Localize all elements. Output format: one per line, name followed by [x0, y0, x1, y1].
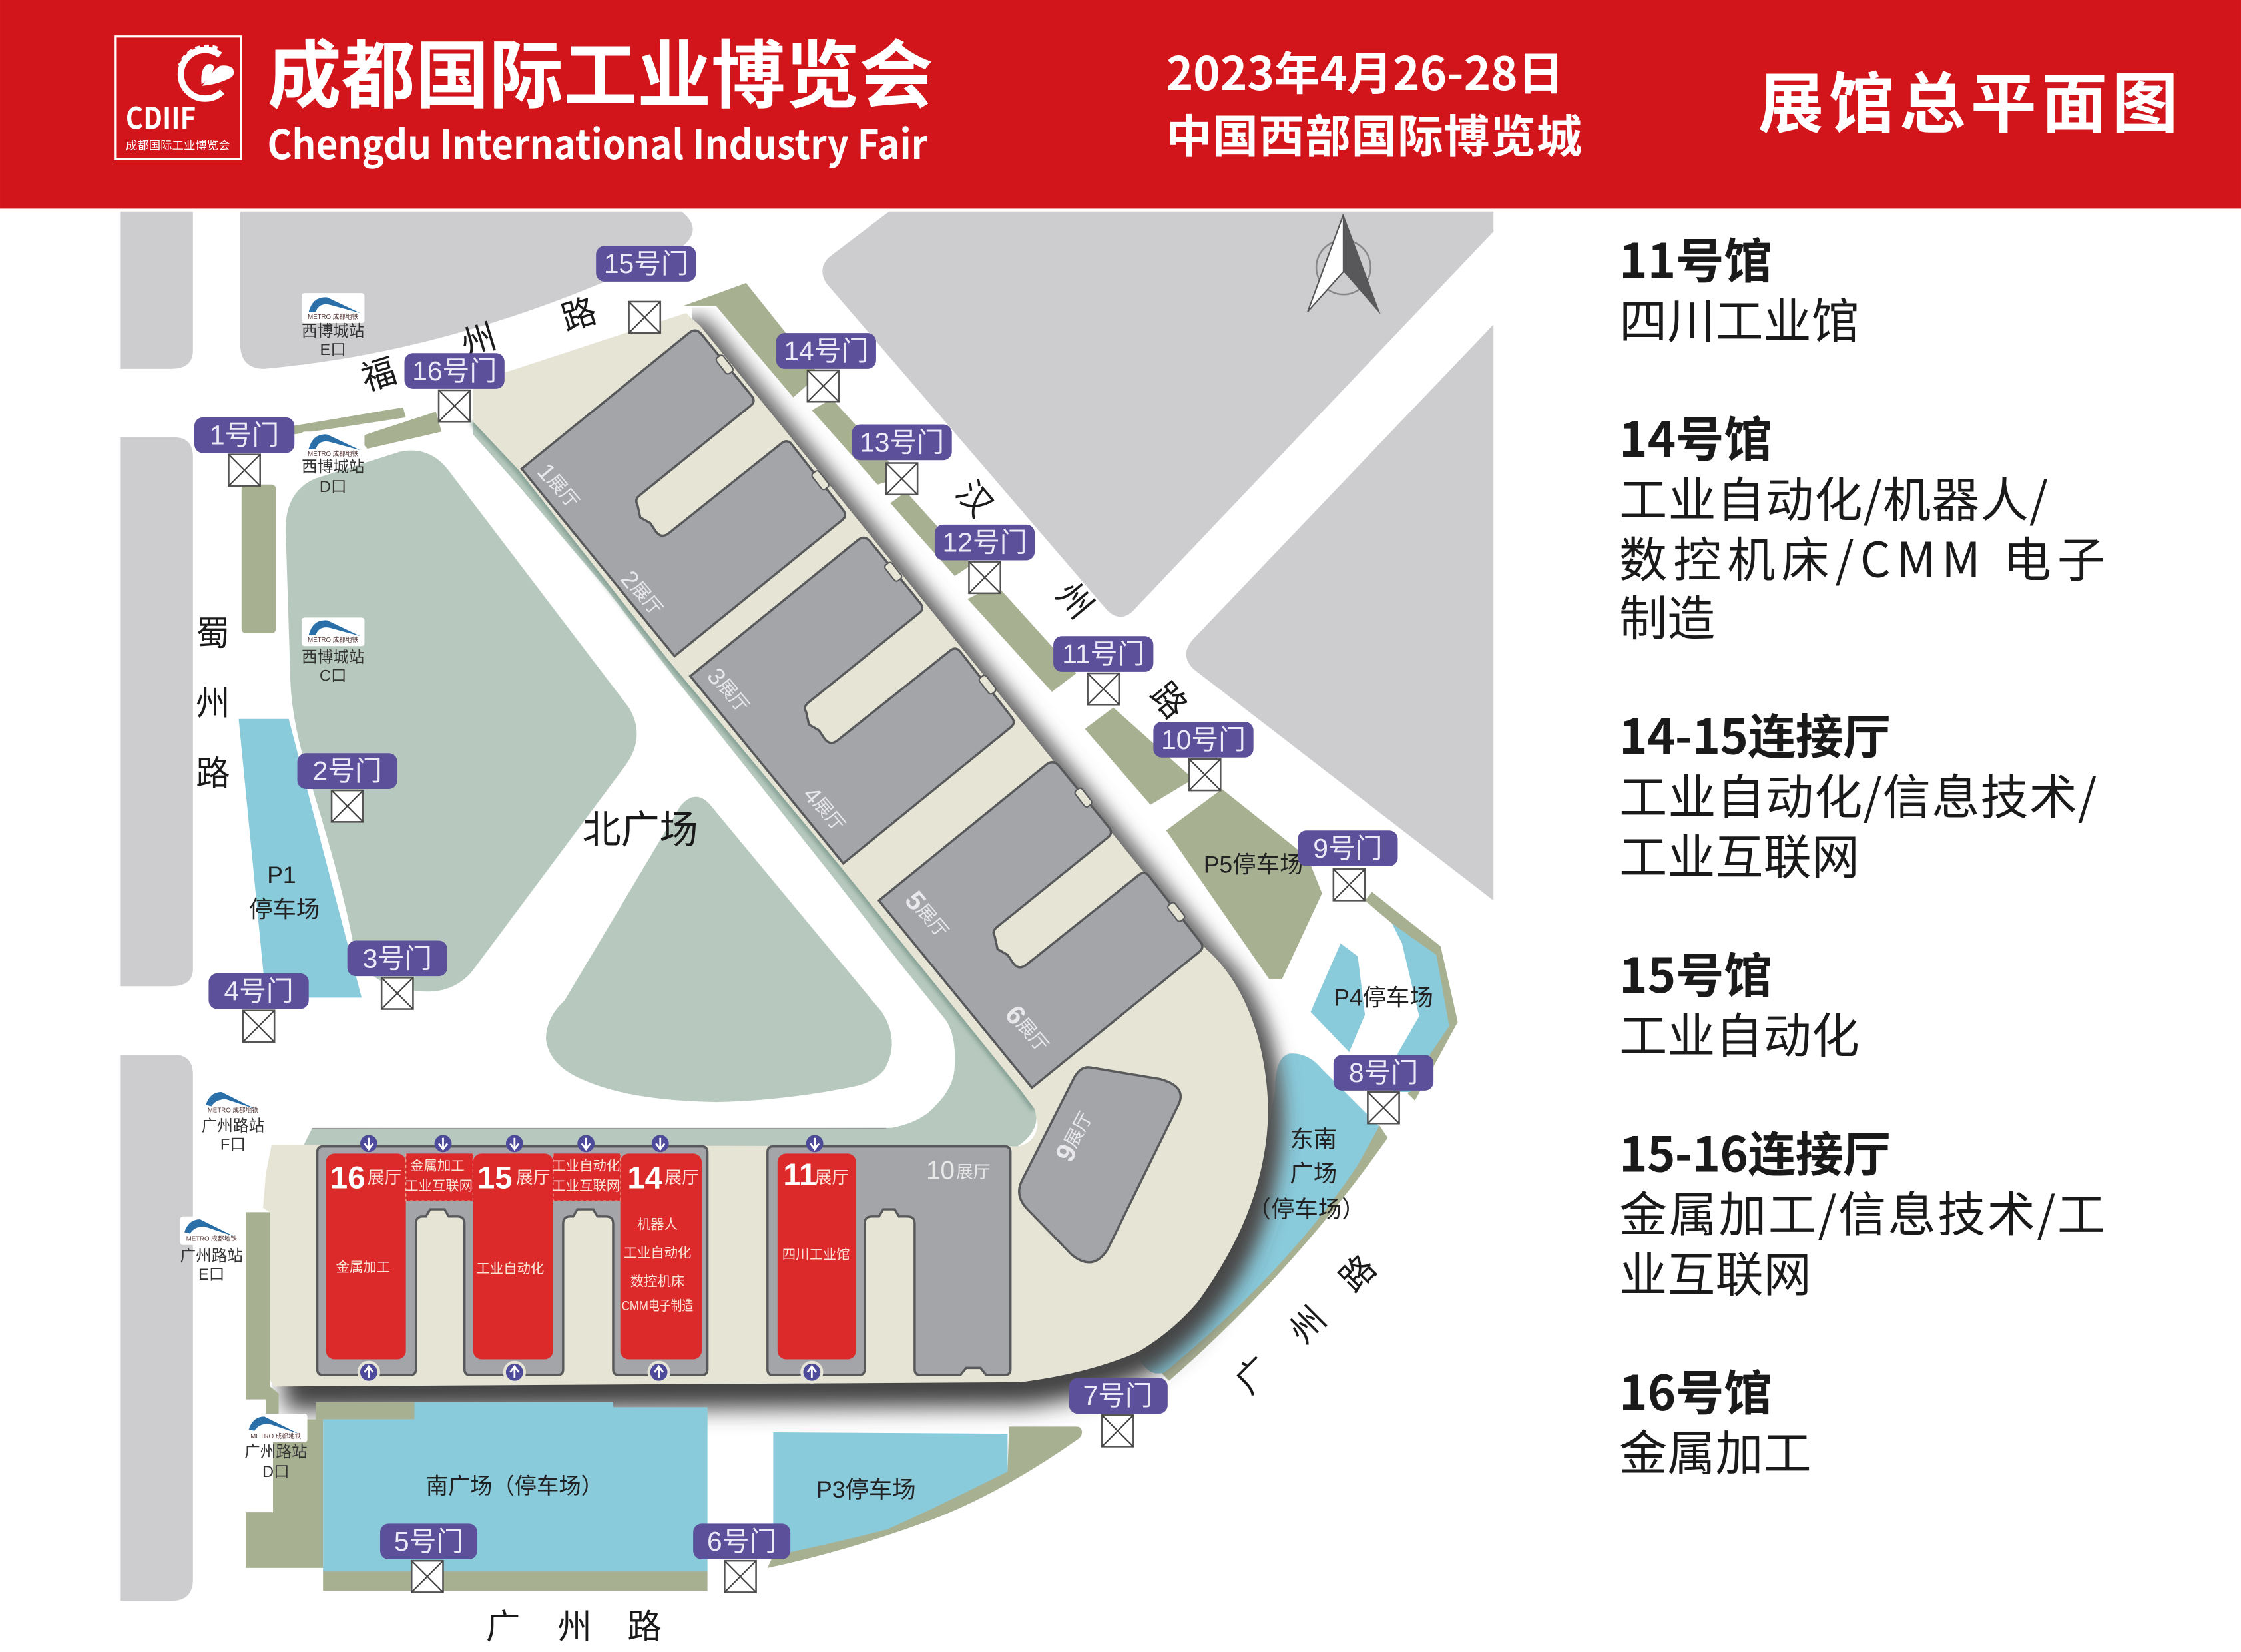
- north plaza label: 北广场: [583, 798, 698, 854]
- metro: Guangzhou Road F: F口: [220, 1136, 246, 1153]
- connector hall 15-16: 工业互联网: [405, 1179, 473, 1194]
- connector hall 14-15: [552, 1153, 621, 1201]
- hall 14: 展厅: [664, 1169, 699, 1187]
- gate 9: [1298, 830, 1397, 900]
- hall 11: 11: [783, 1157, 816, 1193]
- southeast plaza parking: [1139, 1053, 1387, 1381]
- english title: Chengdu International Industry Fair: [267, 112, 927, 171]
- site map: [120, 212, 1493, 1646]
- legend: hall 14: 数控机床/CMM 电子: [1619, 521, 2105, 591]
- gate 1: 1号门: [210, 420, 279, 451]
- hall 9: [1019, 1067, 1180, 1262]
- halls 3 and 4: 4展厅: [798, 781, 852, 837]
- road: Guangzhou Road southeast: 路: [1332, 1248, 1383, 1299]
- legend: hall 16: 金属加工: [1619, 1414, 1812, 1484]
- metro: Xibocheng D: METRO 成都地铁: [308, 450, 359, 458]
- roadside green strips: [242, 283, 1458, 1591]
- metro: Xibocheng D: [302, 431, 364, 496]
- gate 14: 14号门: [784, 336, 868, 366]
- legend: connector 15-16: [1619, 1116, 2105, 1306]
- legend: hall 15: 工业自动化: [1619, 997, 1860, 1067]
- gate 15: [596, 246, 696, 333]
- metro: Xibocheng D: D口: [320, 479, 347, 496]
- gate 2: [298, 753, 397, 822]
- gate 1: [194, 417, 294, 486]
- road: Hanzhou Road: 路: [1143, 675, 1195, 726]
- road: Shuzhou Road: 州: [196, 684, 230, 722]
- road: Shuzhou Road: [196, 614, 230, 792]
- logo: [115, 37, 241, 159]
- halls 1 and 2: 1展厅: [532, 458, 586, 514]
- logo: CDIIF: [126, 94, 196, 137]
- date: 2023年4月26-28日: [1166, 37, 1563, 103]
- gate 7: 7号门: [1083, 1380, 1152, 1411]
- southeast plaza label: 广场: [1290, 1160, 1337, 1187]
- hall 14: 机器人: [637, 1217, 678, 1233]
- gate 10: [1153, 722, 1254, 790]
- hall 11: [778, 1153, 856, 1359]
- road: Hanzhou Road: 州: [1049, 575, 1101, 626]
- hall 16: 金属加工: [336, 1260, 390, 1275]
- road: Fuzhou Road: 州: [457, 317, 501, 364]
- legend: hall 14: 14号馆: [1619, 401, 1772, 471]
- metro: Xibocheng E: [302, 293, 364, 359]
- hall 9: 9展厅: [1049, 1106, 1101, 1167]
- gate 7: [1069, 1378, 1168, 1446]
- north arrow: [1308, 214, 1381, 314]
- gate 6: 6号门: [707, 1526, 776, 1557]
- header banner: [0, 0, 2241, 208]
- road: Guangzhou Road south: [486, 1607, 662, 1646]
- metro: Guangzhou Road E: 广州路站: [180, 1247, 243, 1265]
- connector hall 15-16: [405, 1153, 473, 1201]
- north plaza lawns: [286, 421, 1037, 1147]
- road: Shuzhou Road: 路: [196, 754, 230, 792]
- legend: connector 15-16: 金属加工/信息技术/工: [1619, 1176, 2105, 1246]
- south plaza parking: 南广场（停车场）: [426, 1474, 603, 1499]
- hall 15: 15: [477, 1160, 513, 1195]
- gate 10: 10号门: [1161, 724, 1246, 755]
- halls 14 to 16 shell: [318, 1147, 708, 1375]
- metro: Guangzhou Road F: 广州路站: [202, 1117, 264, 1135]
- legend: connector 15-16: 15-16连接厅: [1619, 1116, 1891, 1186]
- hall 14: 14: [627, 1160, 662, 1195]
- hall 16: 16: [330, 1160, 365, 1195]
- connector hall 14-15: 工业自动化: [552, 1159, 620, 1174]
- metro: Xibocheng E: E口: [320, 342, 346, 359]
- gate 14: [776, 333, 876, 402]
- metro: Guangzhou Road F: [202, 1092, 264, 1153]
- road: Shuzhou Road: 蜀: [196, 614, 230, 653]
- gate 12: [935, 525, 1035, 593]
- hall 16: 展厅: [368, 1169, 401, 1187]
- gate 11: [1053, 636, 1153, 704]
- legend: hall 11: [1619, 222, 1860, 352]
- gate 8: 8号门: [1349, 1057, 1418, 1088]
- hall door tabs: [715, 354, 1186, 922]
- road: Guangzhou Road south: 路: [627, 1607, 662, 1646]
- hall 14: CMM电子制造: [622, 1298, 693, 1314]
- legend: hall 14: [1619, 401, 2105, 650]
- gate 16: 16号门: [412, 356, 497, 386]
- gate 9: 9号门: [1313, 833, 1382, 864]
- P3 parking: [773, 1432, 1007, 1558]
- P1 parking: 停车场: [249, 896, 320, 922]
- halls 1 and 2: 2展厅: [616, 565, 669, 621]
- road: Fuzhou Road: 福: [357, 351, 401, 398]
- gate 13: 13号门: [860, 427, 944, 457]
- gate 6: [693, 1523, 790, 1592]
- metro: Xibocheng C: METRO 成都地铁: [308, 636, 359, 644]
- connector hall 14-15: 工业互联网: [552, 1179, 620, 1194]
- road: Hanzhou Road: [949, 473, 1195, 726]
- halls 10 and 11 shell: [768, 1147, 1011, 1375]
- road: Fuzhou Road: 路: [557, 291, 601, 338]
- P1 parking: [239, 719, 362, 997]
- gate 2: 2号门: [313, 756, 382, 786]
- gate 13: [852, 425, 952, 495]
- P3 parking: P3停车场: [816, 1476, 916, 1503]
- metro: Xibocheng D: 西博城站: [302, 458, 364, 476]
- gate 15: 15号门: [604, 248, 688, 279]
- metro: Guangzhou Road D: [244, 1414, 308, 1481]
- metro: Xibocheng E: METRO 成都地铁: [308, 313, 359, 321]
- gate 4: 4号门: [224, 976, 294, 1007]
- hall 11: 四川工业馆: [782, 1247, 850, 1262]
- gate 5: 5号门: [394, 1526, 463, 1557]
- page title: 展馆总平面图: [1758, 51, 2178, 146]
- legend: hall 16: 16号馆: [1619, 1354, 1772, 1424]
- halls 5 and 6: [879, 762, 1202, 1088]
- legend: hall 11: 11号馆: [1619, 222, 1772, 292]
- road: Guangzhou Road southeast: 广: [1228, 1349, 1279, 1401]
- hall 16: [326, 1153, 406, 1359]
- road: Guangzhou Road south: 州: [557, 1607, 592, 1646]
- P5 parking: P5停车场: [1204, 852, 1303, 878]
- legend: connector 15-16: 业互联网: [1619, 1236, 1812, 1306]
- road: Fuzhou Road: [357, 291, 601, 398]
- hall 11: 展厅: [815, 1169, 849, 1187]
- legend: connector 14-15: 工业自动化/信息技术/: [1619, 758, 2097, 828]
- road: Guangzhou Road southeast: 州: [1282, 1299, 1334, 1351]
- P1 parking: P1: [267, 862, 296, 888]
- metro: Xibocheng C: [302, 617, 364, 685]
- halls 10 and 11 shell: 展厅: [956, 1163, 991, 1181]
- gate 4: [208, 973, 309, 1042]
- road: Guangzhou Road south: 广: [486, 1607, 520, 1646]
- metro: Guangzhou Road D: 广州路站: [244, 1443, 308, 1461]
- P4 parking: [1311, 924, 1449, 1092]
- gate 16: [405, 353, 505, 421]
- venue: 中国西部国际博览城: [1166, 100, 1582, 166]
- legend: hall 16: [1619, 1354, 1812, 1484]
- road: Hanzhou Road: 汉: [949, 473, 1001, 525]
- legend: hall 11: 四川工业馆: [1619, 282, 1860, 352]
- gate 12: 12号门: [943, 527, 1027, 558]
- metro: Guangzhou Road E: [180, 1217, 243, 1284]
- gate 11: 11号门: [1062, 639, 1144, 669]
- metro: Xibocheng E: 西博城站: [302, 322, 364, 340]
- halls 1 and 2: [522, 330, 845, 656]
- hall 15: 工业自动化: [476, 1261, 544, 1276]
- hall 15: [473, 1153, 553, 1359]
- metro: Xibocheng C: 西博城站: [302, 648, 364, 666]
- halls 10 and 11 shell: 10: [926, 1157, 955, 1185]
- legend: hall 14: 工业自动化/机器人/: [1619, 461, 2048, 531]
- surrounding city blocks: [120, 212, 1493, 1601]
- metro: Guangzhou Road E: E口: [198, 1266, 224, 1284]
- gate 3: [348, 941, 447, 1009]
- halls 3 and 4: [690, 538, 1014, 864]
- metro: Xibocheng C: C口: [320, 667, 347, 685]
- road: Guangzhou Road southeast: [1228, 1248, 1383, 1401]
- P5 parking: [1166, 789, 1322, 979]
- gate 3: 3号门: [363, 943, 432, 973]
- legend: connector 14-15: 工业互联网: [1619, 818, 1860, 888]
- metro: Guangzhou Road D: METRO 成都地铁: [250, 1432, 302, 1440]
- southeast plaza label: 东南: [1290, 1126, 1337, 1153]
- legend: connector 14-15: 14-15连接厅: [1619, 698, 1891, 768]
- gate 8: [1334, 1055, 1433, 1123]
- south plaza parking: [323, 1402, 708, 1571]
- exhibition site ground: [263, 313, 1268, 1386]
- legend: connector 14-15: [1619, 698, 2097, 888]
- southeast plaza label: [1248, 1126, 1366, 1223]
- halls 3 and 4: 3展厅: [702, 663, 756, 718]
- halls 5 and 6: 6展厅: [999, 999, 1056, 1059]
- connector hall 15-16: 金属加工: [410, 1159, 465, 1174]
- building shadow: [284, 314, 1282, 1411]
- halls 5 and 6: 5展厅: [899, 885, 956, 945]
- title: 成都国际工业博览会: [267, 17, 933, 124]
- metro: Guangzhou Road F: METRO 成都地铁: [208, 1106, 258, 1114]
- southeast plaza label: （停车场）: [1248, 1196, 1366, 1223]
- hall 14: [621, 1153, 702, 1359]
- hall 14: 数控机床: [630, 1274, 684, 1290]
- metro: Guangzhou Road E: METRO 成都地铁: [186, 1235, 237, 1243]
- legend: hall 14: 制造: [1619, 580, 1715, 650]
- gate 5: [380, 1523, 477, 1592]
- hall 14: 工业自动化: [624, 1246, 691, 1261]
- hall 15: 展厅: [516, 1169, 550, 1187]
- entrance arrows: [358, 1135, 823, 1384]
- metro: Guangzhou Road D: D口: [262, 1464, 290, 1481]
- legend: hall 15: 15号馆: [1619, 937, 1772, 1007]
- legend: hall 15: [1619, 937, 1860, 1067]
- logo: 成都国际工业博览会: [126, 136, 230, 152]
- P4 parking: P4停车场: [1334, 984, 1433, 1011]
